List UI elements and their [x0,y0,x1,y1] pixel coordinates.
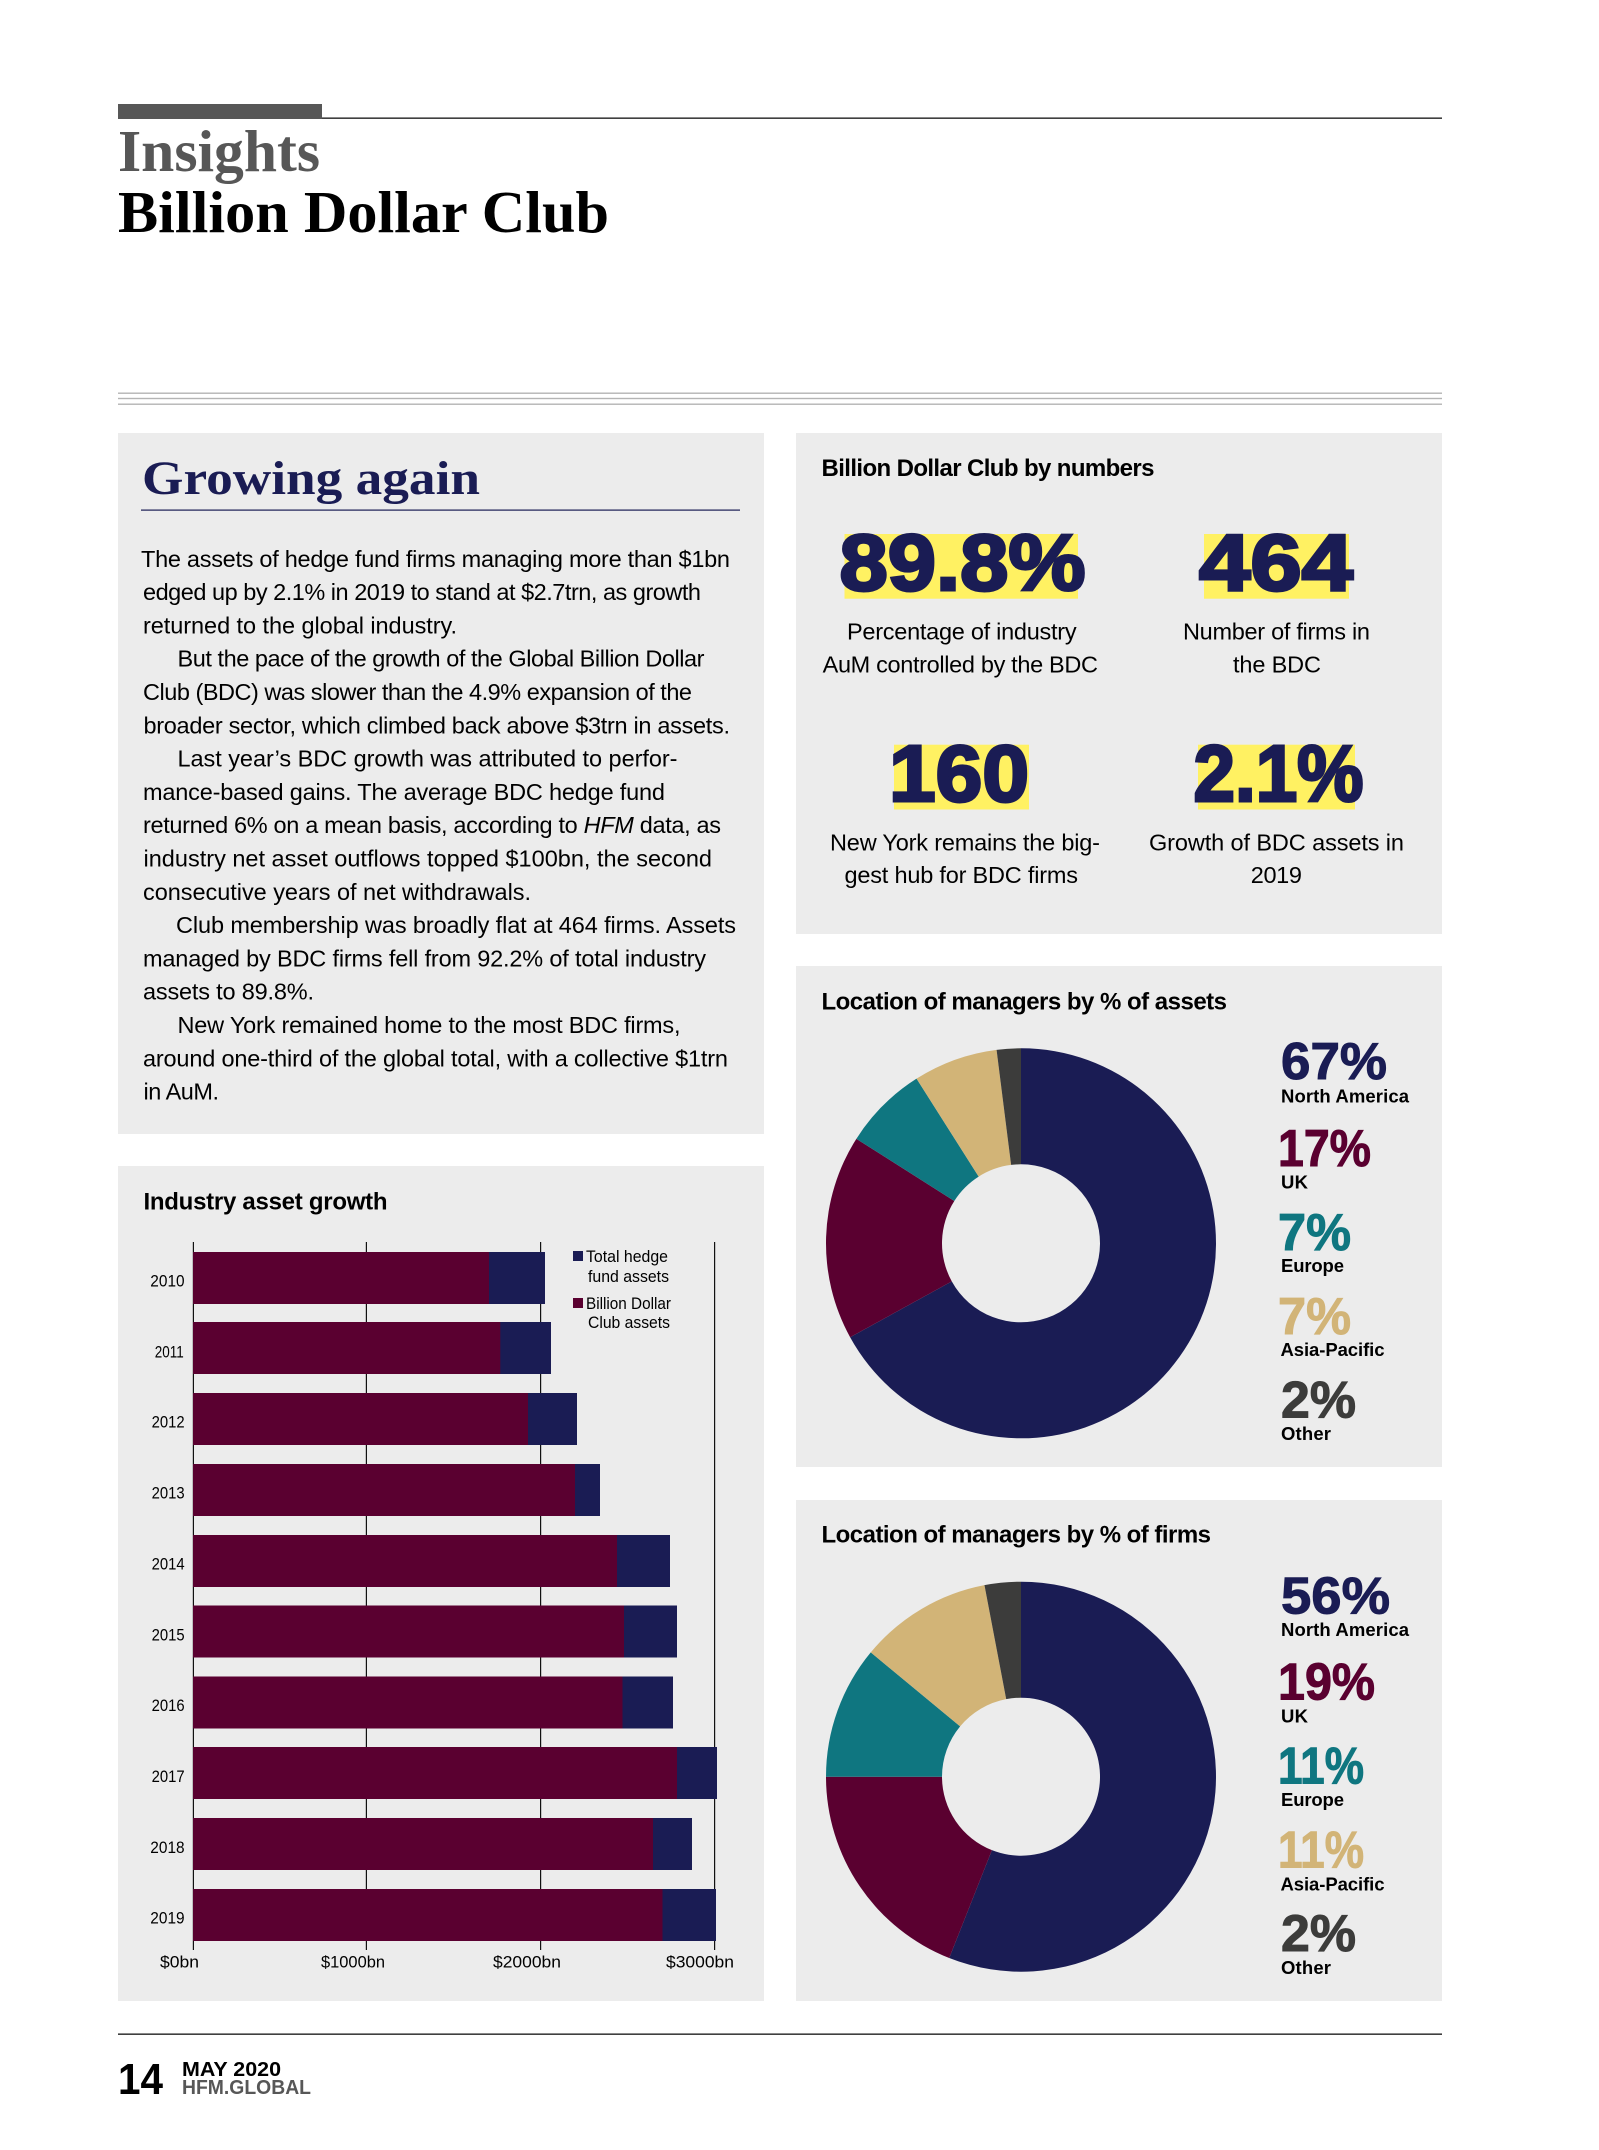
year axis labels: 2015 [152,1626,185,1644]
website: HFM.GLOBAL [182,2077,311,2099]
article body text: broader sector, which climbed back above $3trn in assets. [144,712,730,738]
article body text: assets to 89.8%. [143,979,314,1005]
panel heading: Location of managers by % of firms [822,1521,1211,1548]
value axis labels: $1000bn [321,1954,385,1972]
stat: 89.8%: 89.8% [840,518,1086,607]
article body text: New York remained home to the most BDC firms, [178,1012,680,1038]
stat: 2.1%: 2019 [1251,862,1302,888]
article body text: But the pace of the growth of the Global Billion Dollar [178,646,705,672]
chart legend: Total hedge [586,1248,668,1266]
article body text: Club (BDC) was slower than the 4.9% expansion of the [143,679,692,705]
article body text: managed by BDC firms fell from 92.2% of total industry [143,945,706,971]
stat: 89.8% [823,518,1098,677]
chart legend: Club assets [588,1314,670,1332]
article body text: Club membership was broadly flat at 464 firms. Assets [176,912,736,938]
chart legend: fund assets [588,1268,669,1286]
stat: 160 [830,729,1100,888]
legend: assets: North America [1281,1086,1410,1107]
year axis labels: 2017 [152,1768,185,1786]
year axis labels: 2016 [152,1697,185,1715]
legend: firms: North America [1281,1619,1410,1640]
donut chart: assets [826,1048,1216,1438]
article body text: in AuM. [144,1079,219,1105]
stat: 464 [1183,518,1370,677]
year axis labels: 2014 [152,1556,185,1574]
legend: assets: 17% [1278,1120,1371,1178]
value axis labels: $3000bn [666,1954,734,1972]
bar chart: industry asset growth [150,1242,734,1972]
issue date: MAY 2020 [182,2059,281,2081]
header [118,104,1442,245]
chart legend: Billion Dollar [586,1295,671,1313]
legend: firms: Asia-Pacific [1280,1873,1384,1894]
stat: 464: the BDC [1233,651,1321,677]
panel: Industry asset growth [118,1166,764,2001]
legend: assets: Europe [1281,1255,1344,1276]
value axis labels [160,1954,734,1972]
section label: Insights: Insights [118,118,320,184]
bars by year [193,1252,717,1941]
article body text: mance-based gains. The average BDC hedge fund [143,779,665,805]
panel: Location of managers by % of firms [796,1500,1442,2001]
stat: 160: 160 [889,729,1029,818]
year axis labels: 2010 [150,1272,185,1290]
stat: 464: Number of firms in [1183,618,1370,644]
legend: assets: 7% [1278,1288,1351,1346]
panel heading: Location of managers by % of assets [822,988,1227,1015]
footer [118,2055,311,2104]
panel: Growing again article [118,433,764,1134]
stat: 2.1%: 2.1% [1194,729,1364,818]
article heading: Growing again [142,452,480,505]
legend: firms: 11% [1278,1821,1364,1879]
panel: Location of managers by % of assets [796,966,1442,1467]
article body text: edged up by 2.1% in 2019 to stand at $2.7trn, as growth [143,579,701,605]
stat: 89.8%: AuM controlled by the BDC [823,651,1098,677]
legend: firms: 2% [1281,1905,1356,1963]
panel heading: Billion Dollar Club by numbers [822,455,1154,482]
value axis labels: $2000bn [493,1954,561,1972]
legend: firms: 19% [1278,1653,1375,1711]
stat: 160: gest hub for BDC firms [844,862,1078,888]
legend: firms: 11% [1278,1737,1364,1795]
article body text: Last year’s BDC growth was attributed to perfor- [178,746,678,772]
legend: firms: UK [1281,1705,1309,1726]
panel heading: Industry asset growth [144,1188,388,1215]
article body text [141,546,736,1105]
legend: assets: 7% [1278,1204,1351,1262]
legend: assets: 2% [1281,1372,1356,1430]
chart legend [573,1248,671,1332]
year axis labels: 2012 [152,1414,185,1432]
legend: firms: Other [1281,1957,1331,1978]
article body text: around one-third of the global total, with a collective $1trn [143,1045,728,1071]
year axis labels: 2019 [150,1910,185,1928]
stat: 464: 464 [1199,518,1354,607]
year axis labels: 2018 [150,1839,185,1857]
legend: firms: Europe [1281,1789,1344,1810]
stat: 89.8%: Percentage of industry [847,618,1077,644]
legend: assets: Other [1281,1423,1331,1444]
page number: 14 [118,2055,163,2104]
article body text: The assets of hedge fund firms managing more than $1bn [141,546,730,572]
legend: firms: 56% [1281,1567,1390,1625]
donut chart: firms [826,1582,1216,1972]
article body text: industry net asset outflows topped $100bn, the second [144,846,712,872]
stat: 2.1%: Growth of BDC assets in [1149,829,1404,855]
article body text: returned 6% on a mean basis, according to HFM data, as [143,812,721,838]
legend: assets: UK [1281,1171,1309,1192]
article body text: returned to the global industry. [143,612,457,638]
article body text: consecutive years of net withdrawals. [143,879,531,905]
legend: firms [1278,1567,1410,1978]
legend: assets [1278,1033,1410,1444]
stat: 2.1% [1149,729,1404,888]
year axis labels: 2013 [152,1484,185,1502]
title: Billion Dollar Club: Billion Dollar Club [118,179,609,245]
stat: 160: New York remains the big- [830,829,1100,855]
legend: assets: 67% [1281,1033,1387,1091]
year axis labels [150,1272,185,1928]
year axis labels: 2011 [155,1344,184,1362]
legend: assets: Asia-Pacific [1280,1339,1384,1360]
panel: Billion Dollar Club by numbers [796,433,1442,934]
value axis labels: $0bn [160,1954,199,1972]
